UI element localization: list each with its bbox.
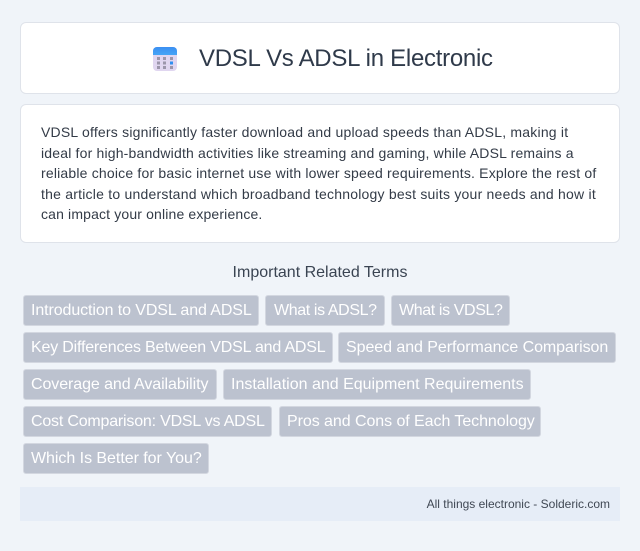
related terms heading: Important Related Terms bbox=[233, 264, 407, 281]
intro text: reliable choice for basic internet use with lower speed requirements. Explore the rest of bbox=[41, 165, 596, 181]
tag: Key Differences: Key Differences Between VDSL and ADSL bbox=[31, 339, 325, 356]
intro text: can impact your online experience. bbox=[41, 206, 262, 222]
intro text: the article to understand which broadband technology best suits your needs and how it bbox=[41, 186, 596, 202]
tag: Installation bbox=[223, 369, 531, 400]
tag list bbox=[23, 295, 616, 474]
tag: What is ADSL: What is ADSL? bbox=[274, 302, 377, 319]
tag: Cost bbox=[23, 406, 272, 437]
tag: Which Is Better: Which Is Better for You? bbox=[31, 450, 202, 467]
intro panel bbox=[20, 104, 620, 243]
intro text: ideal for high-bandwidth activities like streaming and gaming, while ADSL remains a bbox=[41, 144, 574, 160]
tag: Which Is Better bbox=[23, 443, 209, 474]
intro text: VDSL offers significantly faster download and upload speeds than ADSL, making it bbox=[41, 124, 568, 140]
tag: Coverage: Coverage and Availability bbox=[31, 376, 208, 393]
tag: What is VDSL bbox=[391, 295, 510, 326]
tag: Introduction bbox=[23, 295, 259, 326]
tag: Pros and Cons: Pros and Cons of Each Technology bbox=[287, 413, 535, 430]
tag: Cost: Cost Comparison: VDSL vs ADSL bbox=[31, 413, 265, 430]
footer bar bbox=[20, 487, 620, 521]
header panel bbox=[20, 22, 620, 94]
tag: Coverage bbox=[23, 369, 217, 400]
tag: Introduction: Introduction to VDSL and ADSL bbox=[31, 302, 252, 319]
tag: Speed: Speed and Performance Comparison bbox=[346, 339, 608, 356]
intro text bbox=[41, 124, 596, 222]
tag: Installation: Installation and Equipment Requirements bbox=[231, 376, 524, 393]
footer credit: All things electronic - Solderic.com bbox=[427, 497, 610, 511]
title: VDSL Vs ADSL in Electronic bbox=[199, 45, 493, 72]
tag: What is VDSL: What is VDSL? bbox=[399, 302, 503, 319]
tag: Pros and Cons bbox=[279, 406, 541, 437]
icon: calendar bbox=[153, 47, 177, 71]
tag: Key Differences bbox=[23, 332, 333, 363]
tag: Speed bbox=[338, 332, 616, 363]
tag: What is ADSL bbox=[265, 295, 385, 326]
